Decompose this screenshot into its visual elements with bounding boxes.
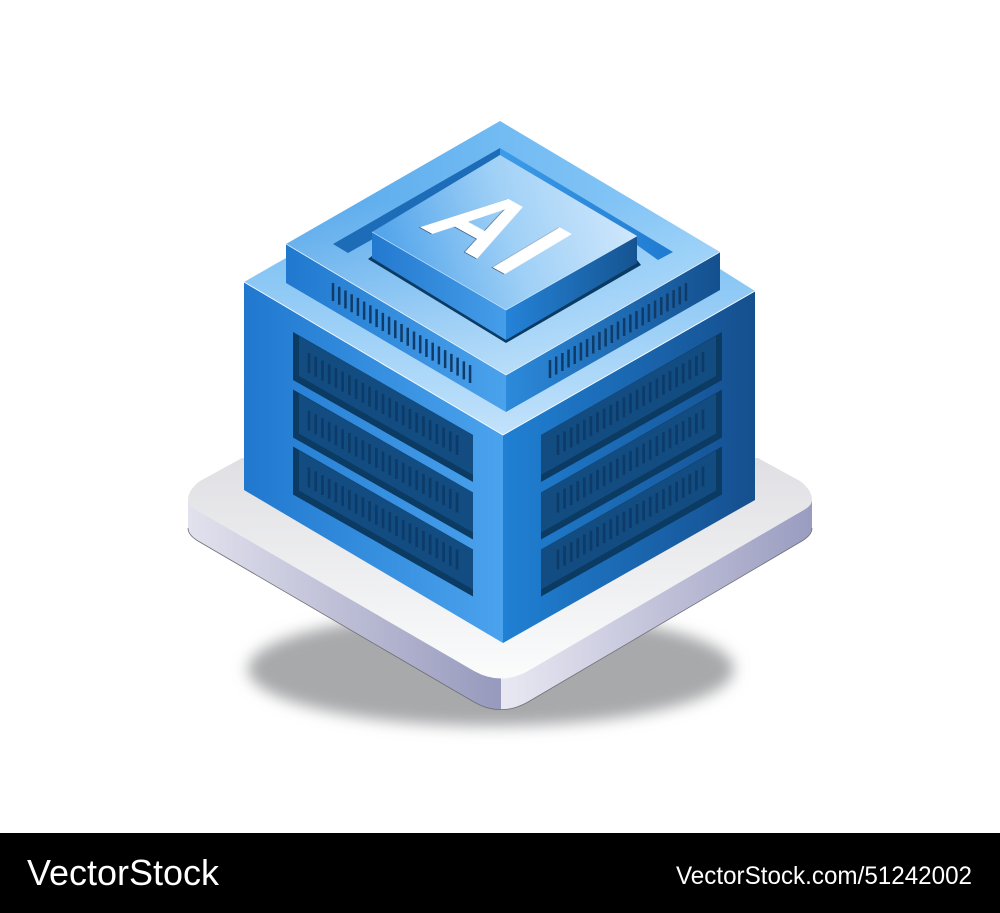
chip drop shadow (368, 256, 641, 343)
body right face (503, 291, 755, 643)
left server rack panels (293, 332, 473, 596)
right rack 3 (541, 446, 722, 596)
body left face (244, 282, 503, 643)
recessed channel right (500, 148, 673, 260)
lid block (286, 121, 720, 412)
platform right side (501, 500, 812, 710)
AI chip (368, 155, 641, 343)
left rack 2 (293, 390, 473, 540)
platform top face (188, 458, 812, 678)
footer bar (0, 833, 1000, 913)
body top ledge (244, 258, 755, 435)
recessed channel left (333, 148, 500, 253)
server body (244, 258, 755, 643)
image id text: VectorStock.com/51242002 (676, 862, 972, 890)
chip top face (372, 155, 637, 310)
right rack 1 (541, 332, 722, 482)
VectorStock logo text: VectorStock (27, 852, 220, 893)
lid top face (286, 121, 720, 375)
AI label: AI (397, 174, 605, 294)
ground shadow (248, 612, 734, 726)
left rack 3 (293, 446, 473, 596)
lid right vent (550, 283, 686, 378)
lid left side (286, 244, 506, 412)
platform bottom outline (188, 528, 812, 710)
lid right side (506, 252, 720, 412)
lid left vent (333, 283, 470, 383)
left rack 1 (293, 332, 473, 482)
right rack 2 (541, 390, 722, 540)
chip left side (372, 232, 506, 340)
chip right side (506, 236, 637, 340)
lid top sheen (286, 121, 720, 375)
platform base (188, 458, 812, 710)
platform left side (188, 500, 501, 710)
right server rack panels (541, 332, 722, 596)
